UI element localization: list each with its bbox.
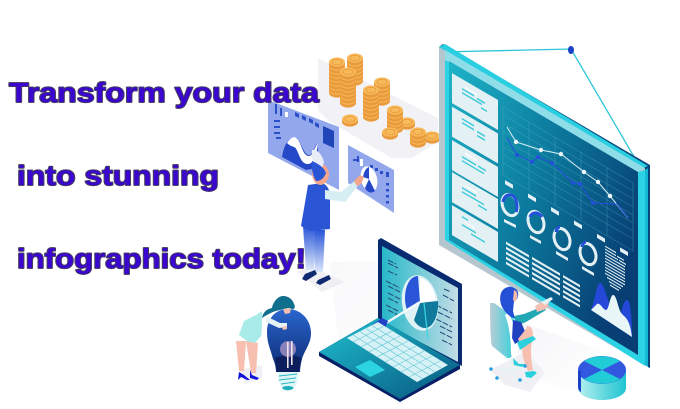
screen pie chart xyxy=(397,272,443,334)
panel: small holographic dashboard xyxy=(348,145,394,213)
floor shadows xyxy=(240,262,600,400)
stylus xyxy=(386,302,420,323)
icon: pie cylinder xyxy=(578,356,626,400)
figure: man at dashboard xyxy=(301,150,364,285)
panel: wall display board xyxy=(439,44,650,368)
panel: large holographic dashboard xyxy=(268,100,339,190)
icon: light bulb xyxy=(267,309,311,391)
area chart xyxy=(591,283,632,337)
screen text lines xyxy=(386,260,454,345)
icon: gold coin stacks xyxy=(329,53,440,148)
text rows xyxy=(506,242,580,307)
keyboard xyxy=(347,322,448,382)
heading line 3: infographics today! xyxy=(17,243,306,274)
rope and pin xyxy=(442,46,640,167)
category labels xyxy=(505,180,628,256)
left list cards xyxy=(452,73,633,341)
icon: laptop xyxy=(319,238,462,402)
heading line 1: Transform your data xyxy=(9,77,319,108)
line chart xyxy=(507,127,628,218)
donut captions xyxy=(504,219,594,276)
figure: seated woman with chair xyxy=(489,287,553,382)
title xyxy=(9,77,319,274)
coin platform xyxy=(318,58,438,158)
figure: woman at bulb xyxy=(236,296,295,380)
donut charts xyxy=(499,192,599,267)
chart grid xyxy=(503,107,633,251)
heading line 2: into stunning xyxy=(17,160,219,191)
trackpad xyxy=(355,360,385,377)
